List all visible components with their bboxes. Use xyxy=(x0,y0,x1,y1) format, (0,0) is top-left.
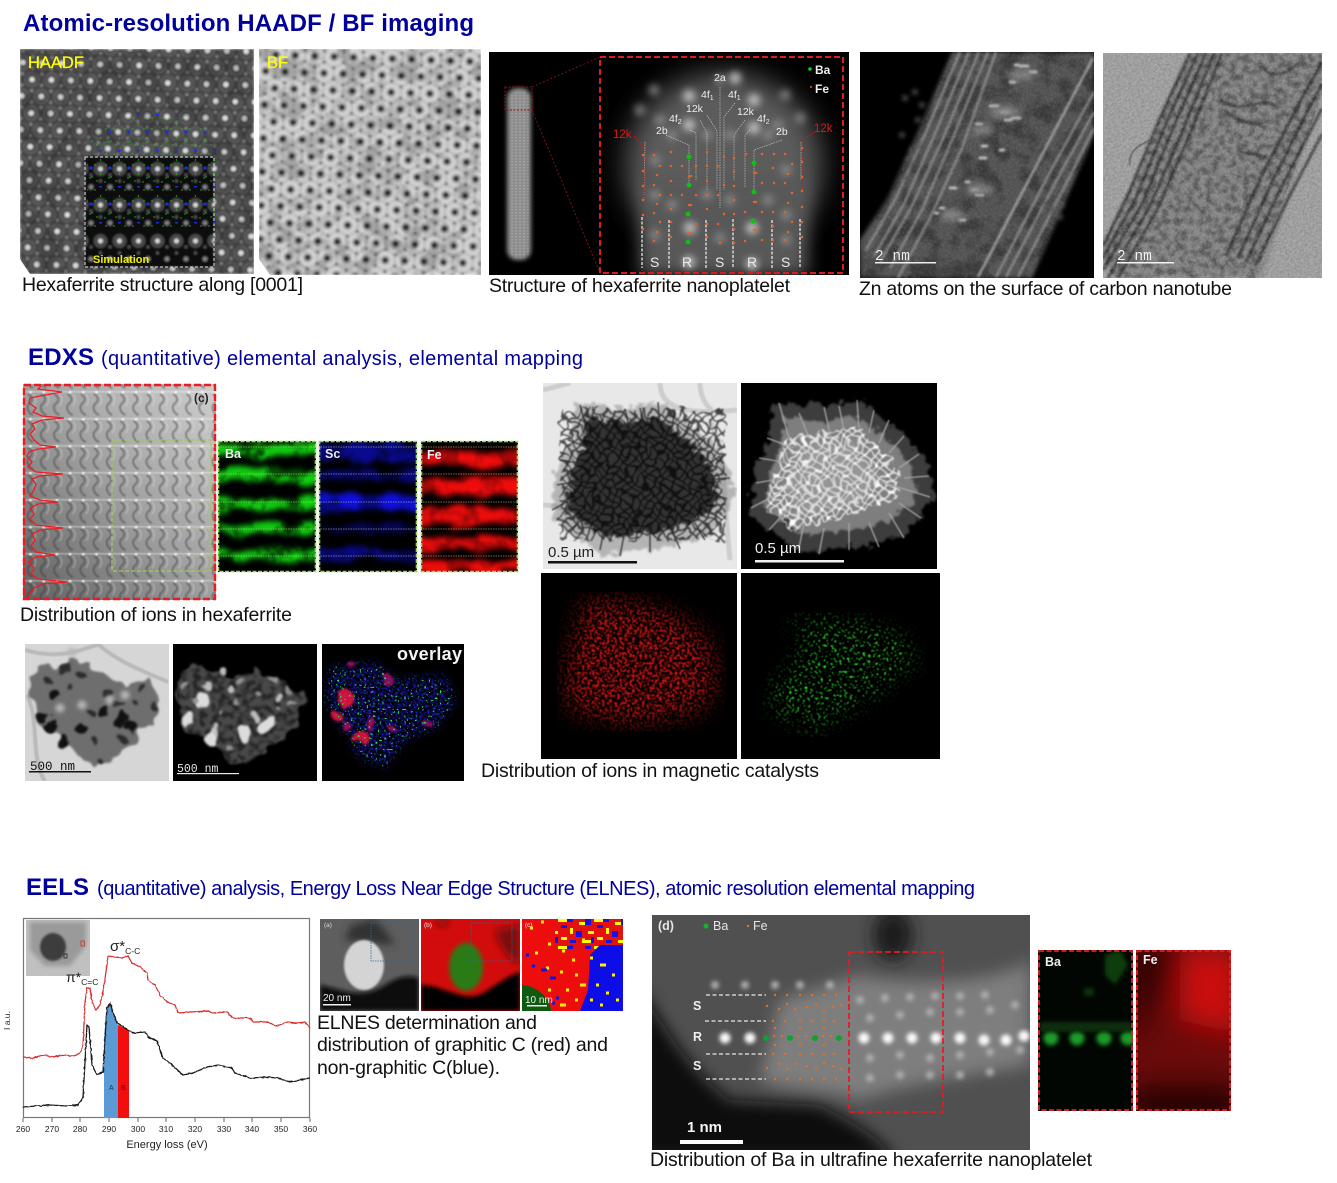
red spectrum xyxy=(23,956,310,1058)
intensity line profile xyxy=(27,386,67,600)
x axis labels: 350 xyxy=(274,1124,288,1134)
label: overlay: overlay xyxy=(397,644,462,664)
x axis labels: 270 xyxy=(45,1124,59,1134)
label: Ba: Ba xyxy=(225,447,242,461)
chart: EELS spectrum: A xyxy=(109,1085,114,1092)
panel letter and legend: Ba xyxy=(713,919,728,933)
site labels: 12k xyxy=(737,106,755,118)
x axis labels: 320 xyxy=(188,1124,202,1134)
site labels xyxy=(613,72,833,141)
inset micrograph xyxy=(26,920,90,976)
image: BF lattice xyxy=(259,49,481,275)
label: Fe: Fe xyxy=(1143,953,1158,967)
site labels: 12k xyxy=(814,123,833,135)
Fe atoms xyxy=(767,995,841,1079)
image: needle catalyst HAADF, 0.5 µm xyxy=(741,383,937,569)
legend: Ba, Fe: Fe xyxy=(815,82,829,96)
needles xyxy=(751,400,930,554)
map: Ba xyxy=(218,441,316,572)
x axis labels: 340 xyxy=(245,1124,259,1134)
S R S R S layer labels: S xyxy=(781,254,790,270)
x axis labels xyxy=(16,1124,317,1134)
site labels: 4f xyxy=(757,113,766,125)
scale bar: 0.5 µm: 0.5 µm xyxy=(548,544,594,561)
bright atom rows xyxy=(725,1036,1024,1040)
image: catalyst TEM, 500 nm xyxy=(25,644,169,781)
x axis labels: 290 xyxy=(102,1124,116,1134)
x axis labels: 280 xyxy=(73,1124,87,1134)
scale bar: 500 nm xyxy=(29,762,91,772)
peak labels xyxy=(66,938,140,987)
tube walls xyxy=(866,52,1094,278)
map: Ba atomic row xyxy=(1038,950,1133,1111)
legend: Ba, Fe: Ba xyxy=(815,63,831,77)
simulation inset xyxy=(85,157,214,267)
Ba atoms xyxy=(688,157,754,242)
scale bar: 500 nm: 500 nm xyxy=(177,763,219,776)
Fe atoms xyxy=(643,148,802,243)
caption: hexaferrite structure: Hexaferrite structure along [0001] xyxy=(22,274,303,296)
image: overlay map xyxy=(322,644,464,781)
caption: magnetic catalysts: Distribution of ions in magnetic catalysts xyxy=(481,760,819,782)
green selection box xyxy=(112,440,211,571)
tube walls xyxy=(1103,53,1322,278)
label: BF: BF xyxy=(267,54,288,72)
image: nanotube bright-field xyxy=(1103,53,1322,278)
panel letter and legend: Fe xyxy=(753,919,768,933)
map: Fe xyxy=(421,441,518,572)
red particle regions xyxy=(337,663,427,737)
scale bar: 2 nm: 2 nm xyxy=(875,249,910,265)
map: red element scatter xyxy=(541,573,737,759)
dark particles xyxy=(43,668,155,760)
legend: Ba, Fe xyxy=(808,66,830,93)
x axis labels: 360 xyxy=(303,1124,317,1134)
panel letter and legend xyxy=(658,919,768,933)
red dashed frame xyxy=(24,385,215,599)
image: atomic-resolution EELS HAADF xyxy=(640,905,1030,1160)
site labels: 4f xyxy=(669,113,678,125)
heading: EDXS: (quantitative) elemental analysis, elemental mapping xyxy=(101,348,583,370)
heading: EDXS: EDXS xyxy=(28,344,94,371)
site labels: 4f xyxy=(728,89,737,101)
site labels: 2b xyxy=(656,125,668,137)
caption: ELNES determination: distribution of graphitic C (red) and xyxy=(317,1034,608,1056)
red dashed analysis box xyxy=(849,952,943,1112)
S R S R S layer labels: S xyxy=(715,254,724,270)
site labels: 2a xyxy=(714,72,726,84)
Zn atom clusters xyxy=(935,65,1036,220)
S R S R S layer labels xyxy=(650,258,790,267)
caption: Zn atoms: Zn atoms on the surface of carbon nanotube xyxy=(859,278,1232,300)
image: hexaferrite nanoplatelet structure xyxy=(489,52,849,275)
map: Sc xyxy=(319,441,417,572)
bright particles xyxy=(185,672,295,750)
site labels: 2 xyxy=(678,119,682,126)
band A xyxy=(104,1004,118,1118)
red dashed zoom box xyxy=(600,57,843,273)
peak labels: C-C xyxy=(125,946,140,956)
x axis labels: 300 xyxy=(131,1124,145,1134)
plot frame xyxy=(24,918,310,1118)
site labels: 1 xyxy=(710,95,714,102)
zoomed glow xyxy=(626,73,822,275)
scale bar: 500 nm xyxy=(177,764,239,774)
map: green element scatter xyxy=(741,573,940,759)
S R S R S layer labels: R xyxy=(682,254,692,270)
image: ELNES (b) xyxy=(421,919,520,1011)
scale bar: 2 nm xyxy=(1117,250,1174,264)
band B xyxy=(118,1025,129,1118)
heading: EELS: EELS xyxy=(26,874,89,901)
image: ELNES (a): (a) xyxy=(324,922,332,929)
x axis title: Energy loss (eV) xyxy=(126,1139,208,1151)
peak labels: C=C xyxy=(81,977,98,987)
label: Simulation: Simulation xyxy=(93,254,150,266)
x axis labels: 330 xyxy=(217,1124,231,1134)
label: Fe: Fe xyxy=(427,448,442,462)
layer labels: S xyxy=(693,1059,701,1073)
label: (c): (c) xyxy=(194,391,209,405)
black spectrum xyxy=(23,1003,310,1107)
nanoplatelet rod xyxy=(505,57,600,273)
layer labels: S xyxy=(693,999,701,1013)
site labels: 12k xyxy=(686,103,704,115)
scale bar: 500 nm: 500 nm xyxy=(30,760,75,774)
x axis labels: 260 xyxy=(16,1124,30,1134)
scale bar: 0.5 µm xyxy=(755,540,844,562)
image: hexaferrite HAADF with line profile xyxy=(23,384,216,600)
scale bar: 2 nm: 2 nm xyxy=(1117,249,1152,265)
S R S R S layer labels: S xyxy=(650,254,659,270)
image: ELNES (c) pixel map: (c) xyxy=(525,922,533,929)
panel letter and legend: (d) xyxy=(658,919,674,933)
scale bar: 1 nm: 1 nm xyxy=(687,1119,722,1136)
site labels: 1 xyxy=(737,95,741,102)
y axis title: I a.u. xyxy=(2,1011,12,1030)
chart: EELS spectrum xyxy=(2,918,317,1151)
map: Fe intensity xyxy=(1130,945,1240,1120)
needles xyxy=(552,402,730,556)
scale bar: 0.5 µm xyxy=(548,544,637,564)
scale bar: 1 nm xyxy=(680,1119,743,1144)
S R S R S layer labels: R xyxy=(747,254,757,270)
caption: distribution of Ba: Distribution of Ba in ultrafine hexaferrite nanoplatelet xyxy=(650,1149,1093,1171)
heading: EELS: (quantitative) analysis, Energy Loss Near Edge Structure (ELNES), atomic resolution elemental mapping xyxy=(97,878,975,900)
site labels: 2b xyxy=(776,126,788,138)
layer guide dashes xyxy=(705,995,766,1079)
scale bar: 10 nm: 10 nm xyxy=(525,995,553,1006)
caption: ELNES determination: ELNES determination and xyxy=(317,1012,537,1034)
x axis ticks xyxy=(23,1118,310,1122)
scale bar: 0.5 µm: 0.5 µm xyxy=(755,540,801,557)
caption: nanoplatelet: Structure of hexaferrite nanoplatelet xyxy=(489,275,791,297)
site labels: 12k xyxy=(613,129,632,141)
site labels: 4f xyxy=(701,89,710,101)
label: Ba: Ba xyxy=(1045,955,1062,969)
image: nanotube HAADF xyxy=(860,52,1094,278)
image: ELNES (b): (b) xyxy=(424,922,432,929)
image: ELNES (c) pixel map xyxy=(488,919,623,1049)
site guide lines xyxy=(644,87,801,208)
scale bar: 20 nm: 20 nm xyxy=(323,993,351,1004)
peak labels: π* xyxy=(66,969,81,985)
heading: atomic-resolution imaging: Atomic-resolution HAADF / BF imaging xyxy=(23,10,474,37)
scale bar: 2 nm xyxy=(875,250,936,264)
image: ELNES (a) xyxy=(320,919,419,1011)
x axis labels: 310 xyxy=(159,1124,173,1134)
image: needle catalyst TEM, 0.5 µm xyxy=(543,383,737,569)
layer labels xyxy=(693,999,702,1073)
label: HAADF: HAADF xyxy=(28,54,84,72)
chart: EELS spectrum: B xyxy=(121,1085,126,1092)
Ba atoms xyxy=(766,1035,839,1041)
caption: distribution of ions in hexaferrite: Distribution of ions in hexaferrite xyxy=(20,604,292,626)
caption: ELNES determination xyxy=(317,1012,608,1079)
image: HAADF lattice xyxy=(20,49,254,274)
atom overlay dots xyxy=(87,110,216,230)
peak labels: σ* xyxy=(110,938,125,955)
label: Sc: Sc xyxy=(325,447,340,461)
site labels: 2 xyxy=(766,119,770,126)
caption: ELNES determination: non-graphitic C(blue). xyxy=(317,1057,500,1079)
layer labels: R xyxy=(693,1030,702,1044)
image: catalyst HAADF, 500 nm xyxy=(173,644,317,781)
